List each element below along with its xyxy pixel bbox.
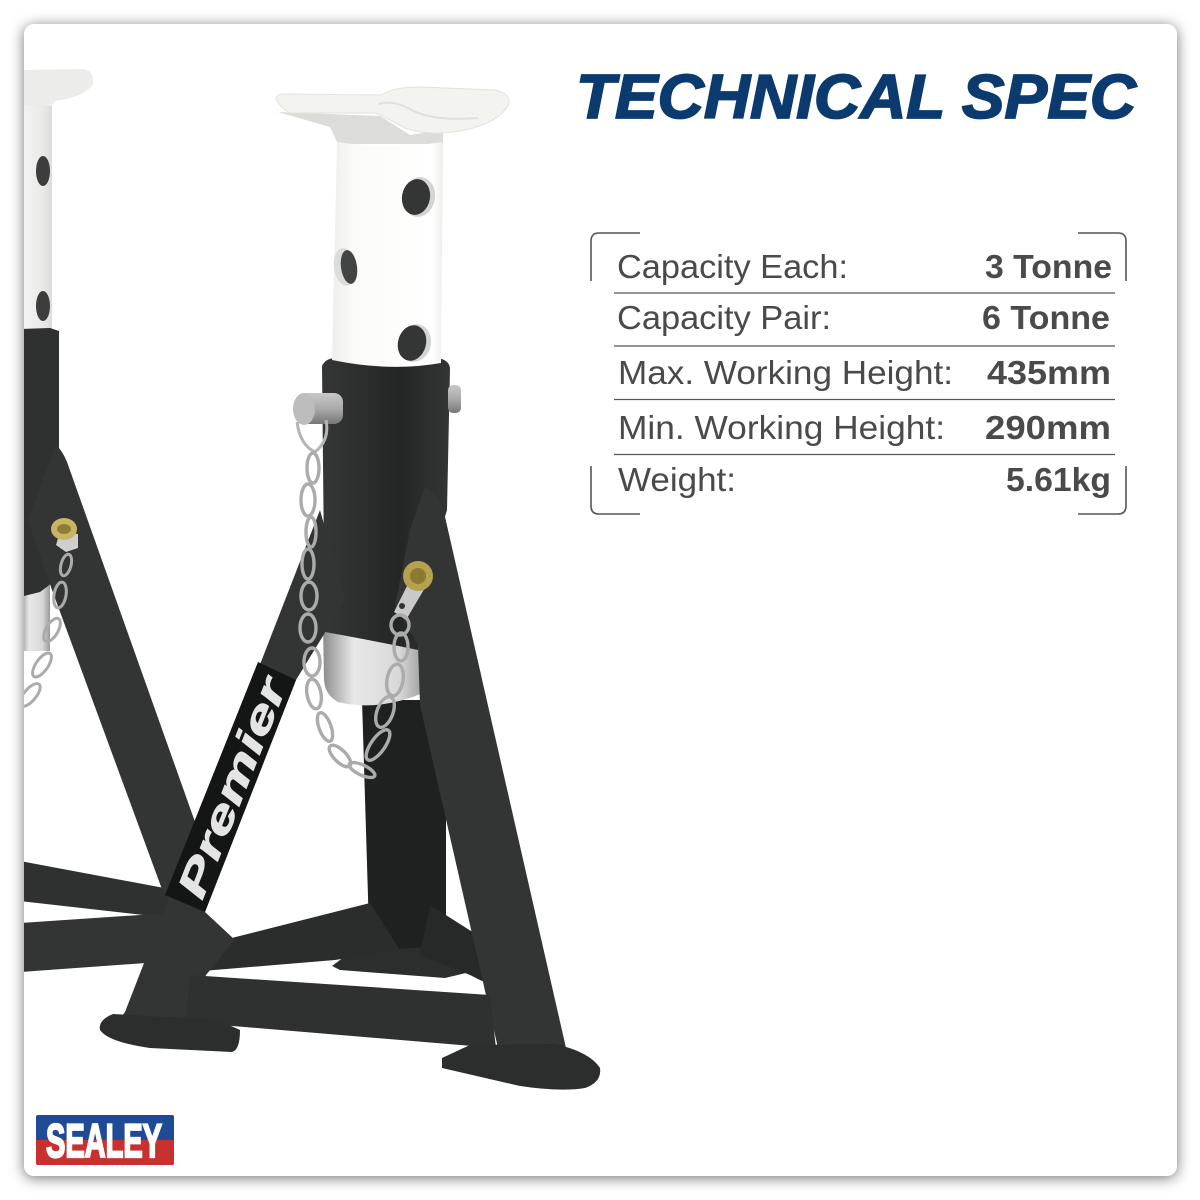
right stand rear bar left bbox=[210, 903, 398, 970]
left stand silver ring bbox=[24, 585, 50, 651]
spec table bbox=[591, 233, 1126, 514]
right stand rear foot bbox=[332, 946, 470, 978]
row: capacity each: Capacity Each: bbox=[617, 248, 848, 285]
right stand bolt and tab bbox=[394, 561, 433, 620]
right stand saddle bbox=[276, 87, 509, 144]
row: weight: 5.61kg bbox=[1006, 461, 1111, 498]
right stand pin bbox=[293, 393, 343, 452]
right stand left leg bbox=[122, 510, 345, 1020]
row: min working height bbox=[618, 409, 1111, 446]
right stand silver ring bbox=[323, 632, 420, 706]
right stand chain bbox=[300, 453, 409, 780]
right stand rear pin bbox=[448, 385, 461, 413]
right stand right leg bbox=[395, 487, 566, 1048]
right stand Premier label bbox=[165, 662, 297, 912]
row: weight bbox=[618, 461, 1111, 498]
table row dividers bbox=[614, 293, 1115, 454]
logo: Sealey: SEALEY bbox=[46, 1114, 162, 1167]
right stand left foot bbox=[100, 1014, 240, 1052]
right stand front cross bar bbox=[185, 975, 496, 1048]
right stand white tube bbox=[332, 142, 443, 367]
left stand rear bars bbox=[24, 862, 169, 972]
right stand tube holes bbox=[331, 175, 438, 365]
row: capacity pair: Capacity Pair: bbox=[617, 299, 831, 336]
title: TECHNICAL SPEC bbox=[576, 63, 1137, 132]
right stand right foot bbox=[442, 1044, 600, 1090]
logo: Sealey bbox=[36, 1114, 174, 1167]
row: max working height: 435mm bbox=[987, 354, 1111, 391]
row: weight: Weight: bbox=[618, 461, 736, 498]
left stand tube bbox=[24, 106, 52, 329]
left stand leg bbox=[40, 448, 195, 889]
row: capacity each: 3 Tonne bbox=[985, 248, 1112, 285]
left stand chain bbox=[24, 552, 74, 708]
left stand holes bbox=[36, 156, 50, 321]
right stand rear bar right bbox=[424, 915, 483, 982]
right stand rear post bbox=[362, 700, 446, 962]
row: capacity each bbox=[617, 248, 1112, 285]
row: capacity pair: 6 Tonne bbox=[982, 299, 1110, 336]
left stand collar bbox=[24, 328, 59, 596]
left stand bolt and tab bbox=[51, 518, 78, 552]
left stand saddle bbox=[24, 69, 94, 106]
right stand collar bbox=[322, 358, 450, 650]
row: min working height: Min. Working Height: bbox=[618, 409, 945, 446]
row: capacity pair bbox=[617, 299, 1110, 336]
table corner brackets bbox=[591, 233, 1126, 514]
right stand Premier label: Premier bbox=[169, 669, 297, 904]
row: max working height: Max. Working Height: bbox=[618, 354, 953, 391]
row: min working height: 290mm bbox=[985, 409, 1111, 446]
row: max working height bbox=[618, 354, 1111, 391]
jack stand: left partial bbox=[16, 69, 600, 1090]
